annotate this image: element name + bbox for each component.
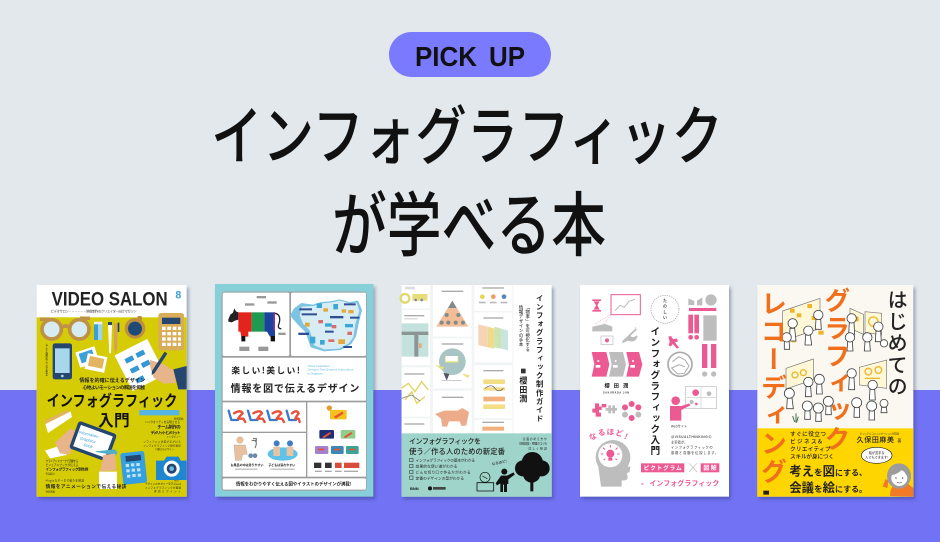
icon: calculator blue [120, 451, 147, 485]
checklist: どんな切り口で作るかがわかる [416, 470, 471, 476]
icon: grey leaves [688, 294, 717, 306]
catch copy: 会議を絵にする。 [789, 478, 867, 496]
icon: tablet with hands [45, 421, 117, 489]
process arrows [592, 352, 642, 377]
author name: SAKURADA JUN [603, 391, 629, 394]
icon: people linked [592, 401, 641, 421]
English subtitle: Designs That Express Information [308, 368, 354, 372]
author name: 櫻田潤 [604, 382, 628, 390]
description text: の [708, 434, 711, 439]
publisher logos [410, 486, 446, 491]
cover headline: 心地よいモーションの解説を掲載 [83, 384, 145, 391]
vertical subtitle: 「物事」を可視化する [525, 305, 531, 352]
publisher logo [763, 491, 769, 495]
panel caption [231, 462, 295, 470]
author: ビジュアルコミュニケーション研究者 [860, 431, 900, 435]
side article text: 特別寄稿 [174, 416, 184, 420]
side article text: インタビュー [167, 435, 181, 439]
icon: tablet with hands: Book [83, 442, 94, 449]
icon: pencils [94, 322, 119, 353]
speech bubble [861, 447, 892, 463]
yellow band copy: スキルが身につく [790, 451, 834, 460]
band side text: 詳しく解説 [528, 446, 547, 450]
vertical subtitle: 情報デザインの手本 [518, 304, 524, 348]
illustration: bath man [234, 436, 257, 460]
vertical book title: インフォグラフィック入門 [648, 327, 662, 457]
blue tag [139, 410, 179, 415]
illustration: pool [268, 440, 298, 461]
book title: 楽しい!美しい! [231, 365, 300, 377]
book cover: VIDEO SALON [37, 285, 189, 499]
icon: paper with hand [115, 339, 187, 391]
badge: PICK UP: PICK [415, 41, 477, 72]
checklist: 定番のデザインの型がわかる [416, 475, 464, 481]
pink label: ピクトグラム × 図解: インフォグラフィック [649, 479, 719, 489]
side article text: デザインのセオリーを学ぶには [145, 482, 182, 486]
badge: PICK UP [389, 32, 551, 77]
English subtitle: in Diagrams [308, 371, 323, 375]
checklist: インフォグラフィックの基本がわかる [416, 458, 475, 464]
illustration: map [290, 299, 362, 351]
title: が学べる本 [332, 170, 606, 271]
illustration: woman [883, 463, 913, 497]
yellow band copy: すぐに役立つ [790, 429, 826, 438]
English subtitle: Visual Inspiration! [308, 364, 330, 368]
lower-left article text: 特別寄稿 [46, 490, 56, 494]
pink label: ピクトグラム × 図解: 図解 [703, 463, 717, 472]
title: インフォグラフィック [211, 86, 723, 178]
band headline: 使う／作る人のための新定番 [409, 446, 506, 457]
icon: calculator tan [158, 313, 184, 350]
book cover: インフォグラフィック制作ガイド [401, 285, 554, 499]
tile graphics [401, 287, 508, 431]
badge: circular たのしい: し [663, 308, 667, 315]
book cover: VIDEO SALON: 8 [175, 290, 181, 302]
side article text: ハイクオリティを実現させる [145, 420, 180, 424]
vertical orange title: グラフィック: グラフィック [819, 287, 856, 453]
lower-left article text: クライアントワークで活躍する [46, 459, 79, 463]
lower-left article text: ビジュアルブックが伝える [46, 463, 79, 467]
cover headline [47, 377, 177, 431]
band side text [519, 437, 548, 450]
description text: 基礎と真髄を伝授します。 [671, 450, 718, 455]
lower-left article text: Magicなデータで動きを解説 [46, 479, 84, 483]
icon: head with lightbulb [596, 440, 630, 487]
masthead: VIDEO SALON [52, 289, 168, 310]
cover headline: 入門 [98, 408, 130, 431]
side article text: 行動力のデザイン [155, 447, 175, 451]
side article text: 特別 [174, 478, 179, 482]
icon: plane figure [668, 336, 679, 349]
book cover: 楽しい!美しい! [215, 284, 375, 499]
book title: 情報を図で伝えるデザイン [231, 380, 359, 395]
checklist [410, 458, 475, 481]
author [857, 431, 901, 445]
vertical orange title: レコーディング: レコーディング [755, 290, 792, 486]
band headline [409, 436, 506, 457]
graphic recording scenes [782, 298, 888, 423]
band headline: インフォグラフィックを [409, 436, 481, 446]
icon: presenter with chart [670, 387, 716, 421]
author name [603, 382, 629, 394]
catch copy: 考えを図にする、 [789, 462, 867, 480]
background: grey upper band [0, 0, 940, 390]
icon: hourglass [592, 299, 601, 312]
speech bubble: 人でもできます! [865, 454, 888, 459]
English subtitle [308, 364, 354, 375]
icon: cup [125, 316, 145, 339]
badge: circular たのしい: の [663, 304, 667, 310]
icon: glasses [40, 318, 90, 339]
background: purple lower band [0, 390, 940, 542]
title [211, 86, 723, 271]
author: 著 [897, 437, 901, 444]
icon: tree [515, 452, 550, 491]
checklist: 効果的な使い道がわかる [416, 464, 458, 470]
icon: exclamation bars [688, 315, 717, 377]
icon: phone [53, 343, 72, 379]
badge: PICK UP: UP [489, 41, 525, 72]
sample page tiles [402, 285, 512, 433]
side article text: インフォグラフィックが最適 [145, 485, 182, 489]
yellow band copy: ビジネス& [790, 436, 822, 445]
book cover: はじめてのグラフィックレコーディング [755, 285, 915, 499]
vertical subtitle [518, 304, 531, 352]
cover headline: 情報を的確に伝えるデザイン [79, 377, 145, 384]
icon: tablet with hands: Information [78, 429, 100, 439]
lower-left article text [46, 459, 127, 494]
book cover: たのしいインフォグラフィック入門 [580, 285, 731, 499]
lower-left article text: 作品紹介 [46, 471, 56, 475]
icon: gift box [477, 472, 494, 491]
side article text: 理由とポイント [154, 489, 181, 493]
side article text [143, 416, 184, 493]
footer tagline: 情報をわかりやすく伝える図やイラストのデザインが満載! [236, 481, 352, 488]
panel frames [223, 293, 366, 490]
teal band [402, 433, 552, 497]
description text: インフォグラフィックの [671, 445, 713, 450]
yellow band copy [790, 429, 834, 460]
icon: photo cards [75, 346, 107, 373]
vertical small text: ムービー制作のノウハウを学ぶ [45, 342, 49, 376]
icon: flag and microscope [601, 327, 638, 345]
pink bar [689, 308, 716, 311]
cover headline: インフォグラフィック [47, 389, 177, 411]
pink label: ピクトグラム × 図解 [641, 463, 719, 489]
publisher logos: BNN [410, 486, 419, 491]
band side text: 企画の考え方や [523, 437, 547, 441]
vertical black title: はじめての: はじめての [883, 289, 912, 398]
speech bubble: 絵が苦手な [869, 450, 885, 455]
side article text: チーム制作の [157, 423, 181, 430]
side article text: デメリットとメリット [151, 429, 181, 436]
vertical book title: インフォグラフィック制作ガイド [534, 294, 545, 423]
icon: camera [156, 457, 187, 480]
icon: tablet with hands: Graphics [79, 436, 96, 444]
panel caption: 子どもは溺れやすい [268, 462, 295, 467]
description text: Webサイト [671, 423, 687, 428]
author: 櫻田潤 [518, 376, 529, 404]
illustration: pyramid of icons [314, 405, 359, 472]
book title [231, 365, 359, 395]
description text: 主宰者が、 [671, 439, 688, 444]
catch copy [789, 462, 867, 496]
description text: @VISUALTHINKING [671, 435, 708, 439]
side article text: インフォグラフィック制作現場 [143, 443, 181, 447]
lower-left article text: インフォグラフィック制作例 [46, 466, 89, 472]
badge: circular たのしい: い [663, 315, 667, 321]
icon: person pointing [496, 469, 515, 492]
callout text: なるほど! [491, 458, 507, 467]
book cover: VIDEO SALON: ビデオサロン・・・・・・映像制作のクリエイター向けマガジン [51, 308, 137, 313]
badge: circular たのしい: た [663, 297, 667, 304]
side article text: ソフトアニメ企業が手がける [143, 440, 181, 444]
description text [671, 423, 718, 455]
pink label: ピクトグラム × 図解: ピクトグラム [644, 463, 682, 472]
badge: circular たのしい [651, 295, 679, 323]
icon: network globe [668, 352, 692, 376]
yellow band copy: クリエイティブ [790, 444, 831, 453]
callout: なるほど!: なるほど! [587, 426, 630, 443]
pink label: ピクトグラム × 図解: = [641, 481, 644, 487]
icon: chart board [592, 295, 640, 331]
illustration: seat diagrams [229, 411, 300, 422]
band side text: 情報収集・整理のコツも [519, 442, 548, 446]
icon: swatch [45, 411, 72, 433]
illustration: cow [228, 296, 286, 351]
author: 久保田麻美 [857, 435, 894, 445]
lower-left article text: 情報をアニメーションで伝える秘訣 [46, 483, 127, 490]
panel caption: お風呂の中は滑りやすい [231, 462, 264, 467]
